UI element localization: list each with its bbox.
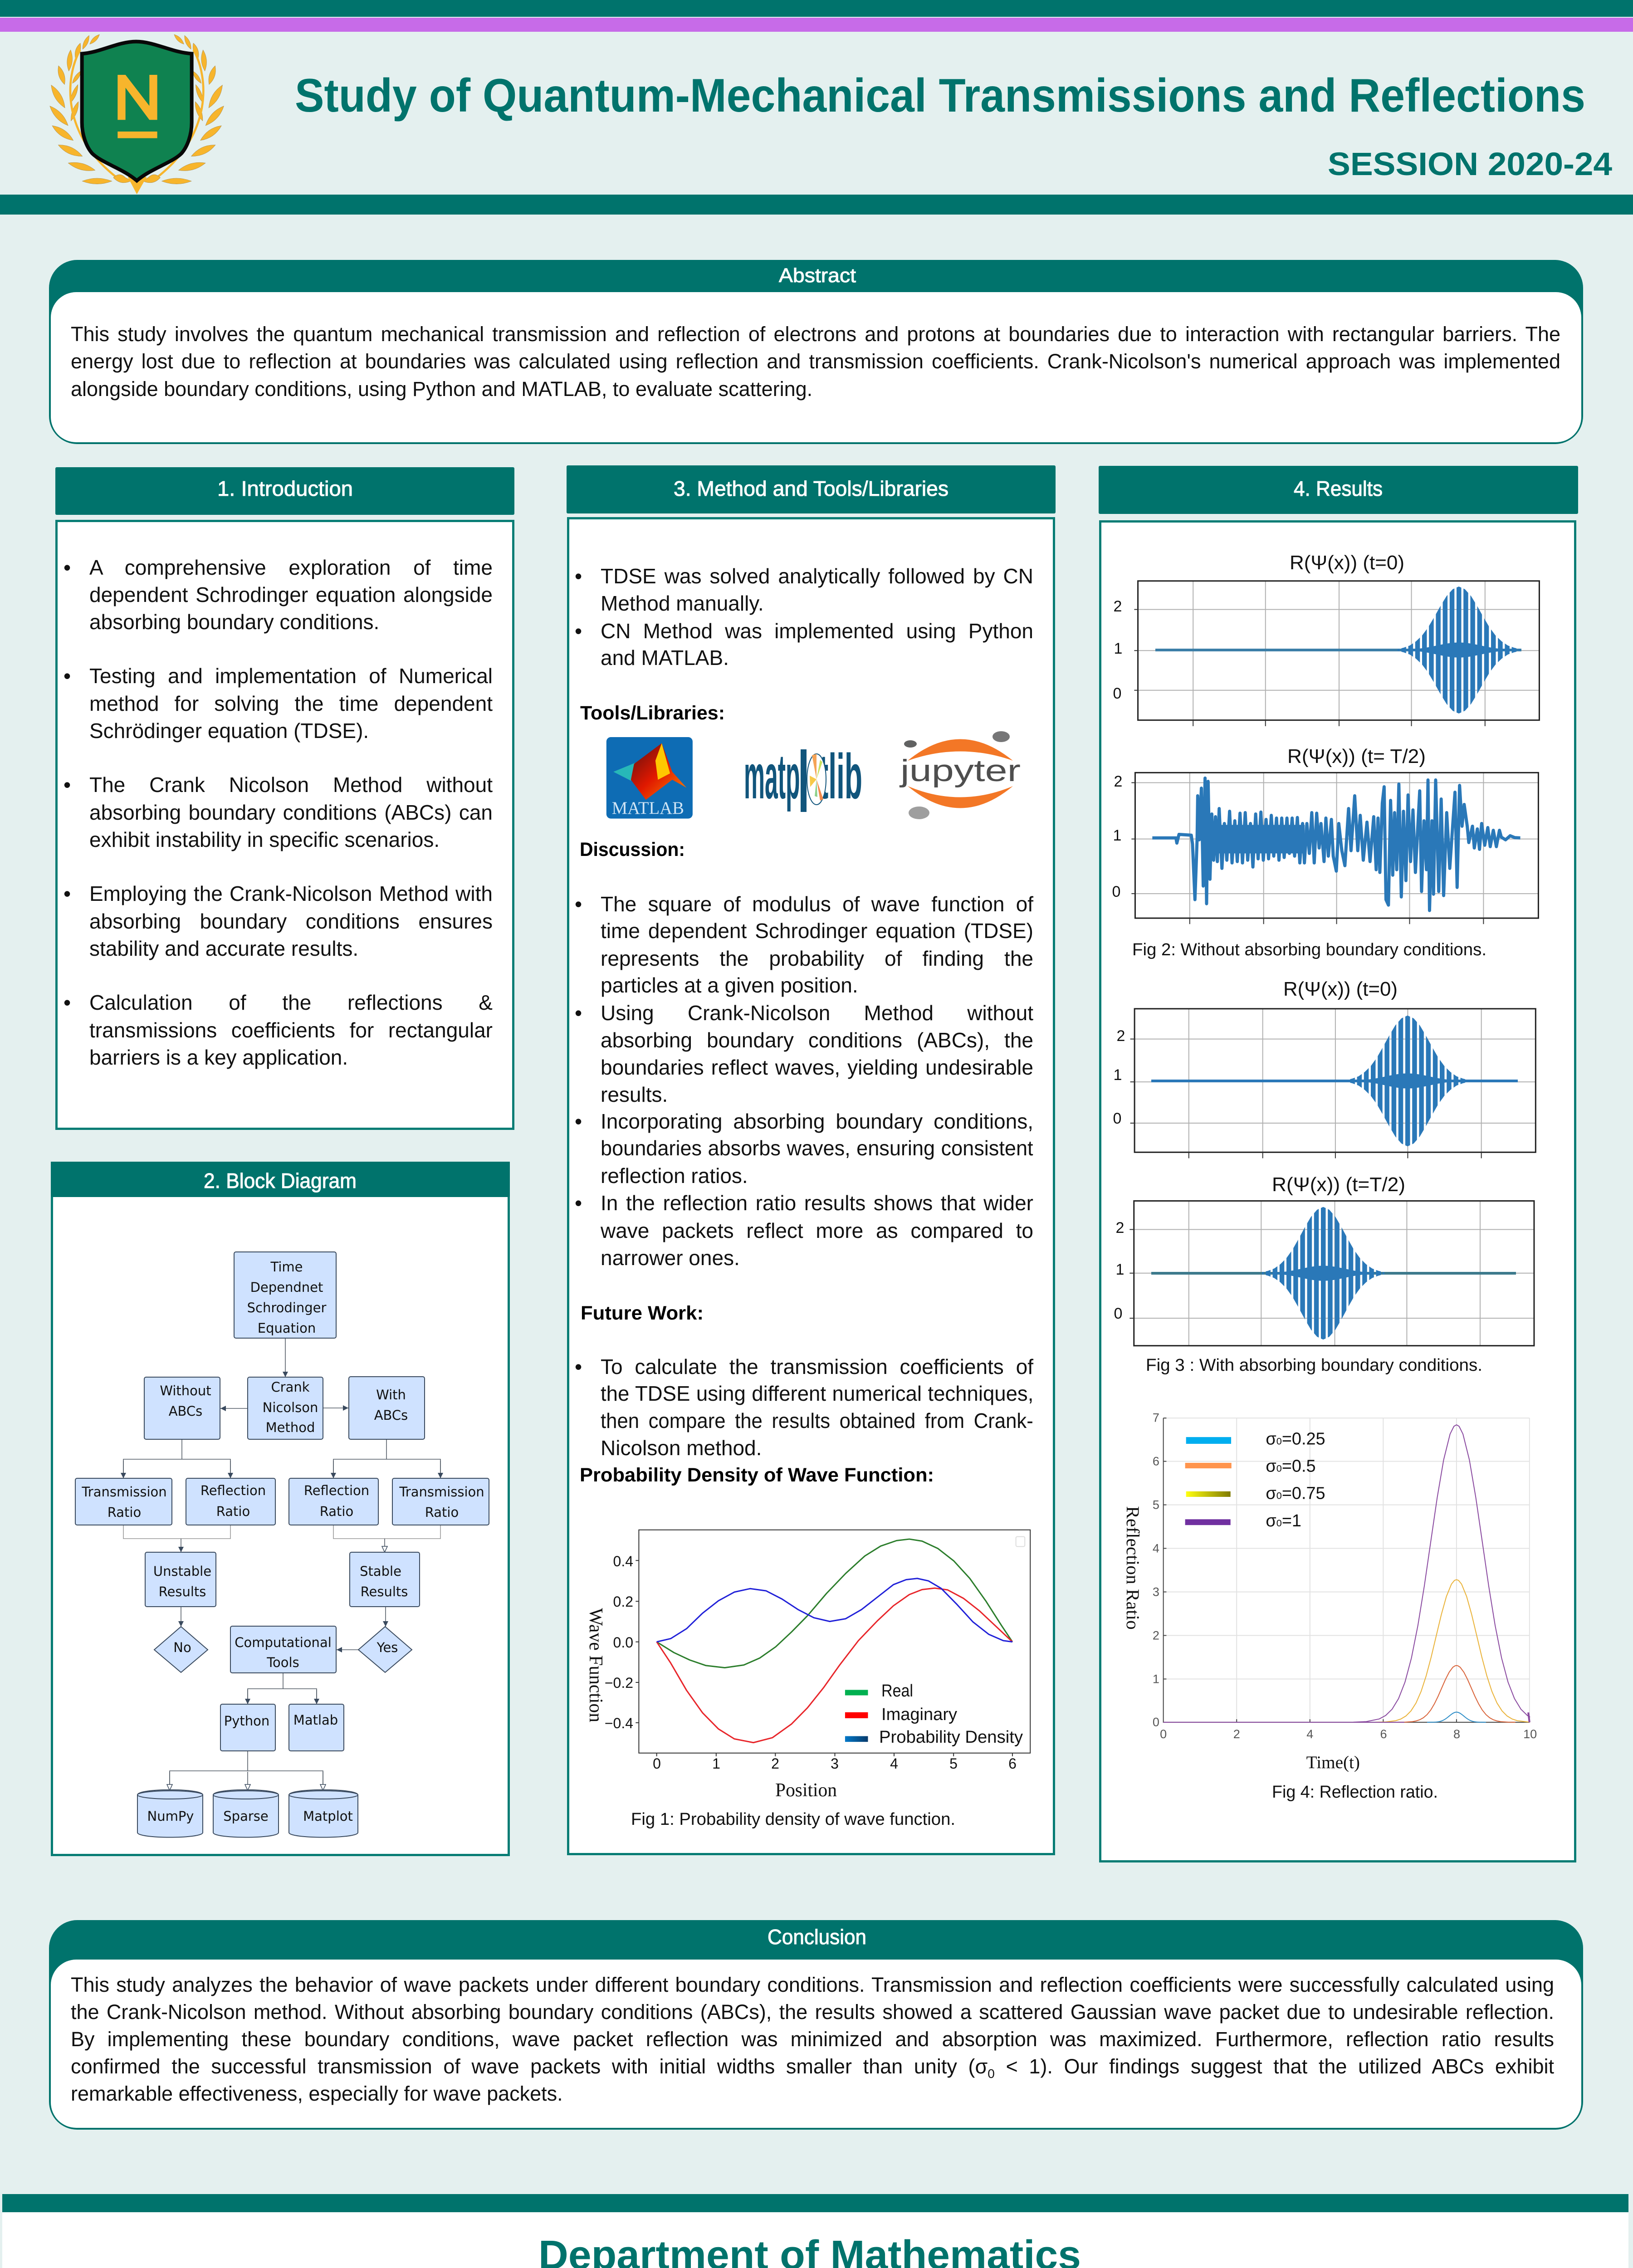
flow node: transmission ratio left: Transmission bbox=[81, 1484, 167, 1500]
icon: matplotlib logo bbox=[744, 741, 862, 812]
bullet list: method bbox=[567, 561, 1056, 674]
flow node: yes decision: Yes bbox=[376, 1640, 398, 1655]
chart: figure 3 bottom, t=T/2: R(Ψ(x)) (t=T/2) bbox=[1272, 1173, 1405, 1196]
chart: figure 4 reflection ratio: 4 bbox=[1153, 1541, 1159, 1555]
chart: figure 4 reflection ratio: 8 bbox=[1453, 1727, 1460, 1741]
flow node: with abcs bbox=[349, 1377, 425, 1439]
header band with logo and title bbox=[0, 0, 1633, 215]
chart: figure 2 top, t=0: R(Ψ(x)) (t=0) bbox=[1290, 552, 1404, 574]
bullet list: discussion: • bbox=[575, 1001, 582, 1025]
conclusion text bbox=[49, 1920, 1583, 2130]
chart: figure 1 wave function: 0.4 bbox=[613, 1553, 633, 1569]
conclusion text: This study analyzes the behavior of wave packets under different boundary conditions. Transmission and reflection coefficients were successfully calculated using bbox=[71, 1973, 1554, 1996]
probability density heading: Probability Density of Wave Function: bbox=[580, 1464, 934, 1486]
bullet list: discussion: absorbing boundary conditions (ABCs), the bbox=[601, 1028, 1033, 1052]
flow node: stable results bbox=[350, 1552, 420, 1607]
flow node: matplot store: Matplot bbox=[303, 1809, 353, 1824]
chart: figure 2 top, t=0: 2 bbox=[1114, 598, 1122, 615]
chart: figure 3 bottom, t=T/2: 1 bbox=[1116, 1261, 1124, 1278]
bullet: crank nicolson with abcs: stability and accurate results. bbox=[89, 937, 358, 960]
bullet list: method: • bbox=[575, 564, 582, 588]
flow node: reflection ratio right: Reflection bbox=[304, 1483, 369, 1498]
abstract body background bbox=[51, 292, 1581, 442]
flow node: python bbox=[220, 1704, 275, 1751]
flow node: yes decision bbox=[358, 1627, 412, 1672]
bullet: crank nicolson with abcs: • bbox=[64, 882, 71, 905]
bullet list: discussion: time dependent Schrodinger equation (TDSE) bbox=[601, 919, 1033, 943]
method heading: 3. Method and Tools/Libraries bbox=[674, 477, 949, 500]
panel: 3. method and tools: tlib bbox=[819, 741, 862, 812]
conclusion text: By implementing these boundary conditions, wave packet reflection was minimized and absorption was maximized. Furthermore, reflection ratio results bbox=[71, 2028, 1554, 2051]
chart: figure 3 top, t=0: 0 bbox=[1113, 1110, 1121, 1127]
future work heading: Future Work: bbox=[581, 1302, 704, 1324]
chart: figure 3 top, t=0: 1 bbox=[1114, 1066, 1122, 1084]
abstract text: alongside boundary conditions, using Python and MATLAB, to evaluate scattering. bbox=[71, 377, 812, 401]
flow node: computational tools: Tools bbox=[266, 1655, 299, 1670]
introduction heading: 1. Introduction bbox=[217, 477, 353, 500]
flow node: without abcs: Without bbox=[160, 1383, 211, 1398]
bullet list: method: • bbox=[575, 619, 582, 643]
chart: figure 4 reflection ratio: 1 bbox=[1153, 1672, 1159, 1686]
bullet: coefficients bbox=[55, 989, 514, 1070]
chart: figure 4 reflection ratio: σ0=1 bbox=[1266, 1511, 1301, 1530]
bullet list: discussion: Incorporating absorbing boundary conditions, bbox=[601, 1110, 1033, 1133]
bullet: numerical method: Testing and implementation of Numerical bbox=[89, 664, 493, 688]
flow node: reflection ratio left bbox=[186, 1478, 275, 1525]
flow node: time dependent schrodinger equation: Equation bbox=[258, 1320, 316, 1336]
flow node: time dependent schrodinger equation: Dependnet bbox=[250, 1280, 323, 1295]
chart: figure 4 reflection ratio: 0 bbox=[1160, 1727, 1167, 1741]
flowchart connectors bbox=[123, 1338, 440, 1790]
conclusion text: remarkable effectiveness, especially for wave packets. bbox=[71, 2082, 563, 2105]
bullet: exploration bbox=[55, 553, 514, 635]
flow node: stable results: Results bbox=[361, 1584, 408, 1599]
panel: 1. introduction bbox=[55, 467, 514, 1130]
flow node: computational tools: Computational bbox=[235, 1635, 332, 1650]
chart: figure 4 reflection ratio: 0 bbox=[1153, 1716, 1159, 1729]
flow node: crank nicolson method: Method bbox=[266, 1420, 315, 1435]
footer bbox=[0, 2194, 1633, 2268]
bottom teal bar bbox=[0, 195, 1633, 215]
introduction body bbox=[55, 520, 514, 1130]
bullet list: discussion: • bbox=[575, 1110, 582, 1133]
chart: figure 1 wave function: Position bbox=[775, 1780, 837, 1801]
bullet list: discussion bbox=[567, 892, 1056, 1273]
chart: figure 4 reflection ratio: 6 bbox=[1380, 1727, 1387, 1741]
chart: figure 1 wave function: Probability Density bbox=[879, 1728, 1023, 1747]
top teal bar bbox=[0, 0, 1633, 17]
flow node: crank nicolson method bbox=[248, 1377, 323, 1439]
figure 1 caption: Fig 1: Probability density of wave function. bbox=[631, 1810, 955, 1829]
results heading: 4. Results bbox=[1294, 477, 1383, 500]
bullet: numerical method: Schrödinger equation (TDSE). bbox=[89, 719, 369, 743]
chart: figure 1 wave function: Real bbox=[881, 1681, 913, 1701]
bullet list: discussion: The square of modulus of wave function of bbox=[601, 892, 1033, 916]
chart: figure 4 reflection ratio: Reflection Ratio bbox=[1123, 1506, 1143, 1630]
icon: university shield logo bbox=[48, 33, 226, 194]
tools heading: Tools/Libraries: bbox=[580, 702, 725, 724]
block diagram body bbox=[51, 1162, 510, 1856]
figure 3 caption: Fig 3 : With absorbing boundary conditions. bbox=[1146, 1356, 1482, 1375]
bullet list: future work bbox=[567, 1354, 1056, 1463]
bullet list: future work: the TDSE using different numerical techniques, bbox=[601, 1382, 1033, 1405]
bullet list: discussion: In the reflection ratio results shows that wider bbox=[601, 1191, 1033, 1215]
bullet list: discussion: represents the probability of finding the bbox=[601, 947, 1033, 970]
flow node: no decision bbox=[154, 1627, 208, 1672]
flow node: transmission ratio right: Transmission bbox=[399, 1484, 484, 1500]
chart: figure 4 reflection ratio: 10 bbox=[1523, 1727, 1537, 1741]
bullet list: discussion: • bbox=[575, 892, 582, 916]
chart: figure 3 bottom, t=T/2 bbox=[1114, 1173, 1534, 1346]
method header bar bbox=[567, 465, 1056, 513]
bullet: coefficients: Calculation of the reflections & bbox=[89, 991, 493, 1014]
flow node: python: Python bbox=[224, 1713, 269, 1729]
flow node: reflection ratio left: Ratio bbox=[216, 1504, 250, 1519]
flow node: matplot store bbox=[289, 1790, 358, 1837]
bullet: crank nicolson without abcs: The Crank Nicolson Method without bbox=[89, 773, 493, 797]
flow node: time dependent schrodinger equation: Schrodinger bbox=[247, 1300, 326, 1315]
bullet list: discussion: reflection ratios. bbox=[601, 1164, 748, 1188]
bullet: crank nicolson without abcs: absorbing boundary conditions (ABCs) can bbox=[89, 801, 493, 824]
chart: figure 4 reflection ratio: 4 bbox=[1306, 1727, 1313, 1741]
icon: jupyter logo bbox=[899, 731, 1021, 819]
bullet: exploration: absorbing boundary conditions. bbox=[89, 610, 379, 634]
abstract text: This study involves the quantum mechanical transmission and reflection of electrons and protons at boundaries due to interaction with rectangular barriers. The bbox=[71, 323, 1560, 346]
bullet: coefficients: transmissions coefficients for rectangular bbox=[89, 1018, 493, 1042]
bullet list: discussion: particles at a given position. bbox=[601, 973, 858, 997]
panel: abstract bbox=[49, 260, 1583, 444]
chart: figure 2 bottom, t=T/2: 1 bbox=[1113, 827, 1121, 844]
chart: figure 1 wave function: −0.4 bbox=[605, 1715, 633, 1731]
bullet list: method: Method manually. bbox=[601, 591, 764, 615]
chart: figure 2 bottom, t=T/2: 2 bbox=[1114, 773, 1122, 790]
panel: 3. method and tools bbox=[567, 465, 1056, 1855]
chart: figure 1 wave function: 4 bbox=[890, 1755, 898, 1772]
session label: SESSION 2020-24 bbox=[1328, 147, 1613, 182]
bullet list: discussion: wave packets reflect more as compared to bbox=[601, 1219, 1033, 1242]
bullet list: discussion: boundaries reflect waves, yielding undesirable bbox=[601, 1056, 1033, 1079]
conclusion text: confirmed the successful transmission of wave packets with initial widths smaller than unity (σ0 < 1). Our findings suggest that the utilized ABCs exhibit bbox=[71, 2055, 1554, 2081]
bullet list: method: and MATLAB. bbox=[601, 646, 729, 670]
icon: matlab logo: MATLAB bbox=[612, 798, 684, 818]
figure 4 caption: Fig 4: Reflection ratio. bbox=[1272, 1783, 1438, 1802]
footer teal strip bbox=[2, 2194, 1628, 2212]
results header bar bbox=[1099, 466, 1578, 514]
flow node: reflection ratio right: Ratio bbox=[320, 1504, 353, 1519]
flow node: transmission ratio left bbox=[75, 1478, 172, 1525]
flow node: numpy store: NumPy bbox=[147, 1809, 194, 1824]
flow node: without abcs: ABCs bbox=[169, 1403, 202, 1419]
panel: conclusion bbox=[49, 1920, 1583, 2130]
chart: figure 4 reflection ratio bbox=[1123, 1411, 1560, 1772]
bullet list: future work: then compare the results obtained from Crank- bbox=[601, 1409, 1033, 1432]
icon: jupyter logo: jupyter bbox=[899, 753, 1021, 788]
flow node: time dependent schrodinger equation: Time bbox=[270, 1259, 303, 1275]
chart: figure 2 top, t=0: 0 bbox=[1113, 685, 1121, 702]
chart: figure 3 top, t=0 bbox=[1113, 978, 1535, 1158]
bullet: coefficients: barriers is a key application. bbox=[89, 1046, 348, 1069]
block diagram header bar bbox=[51, 1162, 510, 1197]
bullet: crank nicolson with abcs bbox=[55, 880, 514, 962]
figure 2 caption: Fig 2: Without absorbing boundary conditions. bbox=[1132, 940, 1486, 959]
bullet list: future work: Nicolson method. bbox=[601, 1436, 762, 1460]
chart: figure 1 wave function: 3 bbox=[831, 1755, 839, 1772]
bullet list: method: CN Method was implemented using Python bbox=[601, 619, 1033, 643]
chart: figure 4 reflection ratio: σ0=0.75 bbox=[1266, 1484, 1325, 1503]
abstract heading: Abstract bbox=[779, 264, 856, 287]
chart: figure 2 top, t=0: 1 bbox=[1114, 640, 1122, 657]
bullet: crank nicolson without abcs: • bbox=[64, 773, 71, 797]
flow node: numpy store bbox=[137, 1790, 203, 1837]
purple bar bbox=[0, 18, 1633, 32]
flow node: time dependent schrodinger equation bbox=[234, 1252, 336, 1338]
chart: figure 1 wave function: 0.0 bbox=[613, 1634, 633, 1651]
bullet: numerical method: • bbox=[64, 664, 71, 688]
bullet: numerical method bbox=[55, 662, 514, 744]
chart: figure 4 reflection ratio: 2 bbox=[1233, 1727, 1240, 1741]
bullet: exploration: A comprehensive exploration of time bbox=[89, 556, 493, 579]
panel: 4. results bbox=[1099, 466, 1578, 1862]
bullet: crank nicolson with abcs: Employing the Crank-Nicolson Method with bbox=[89, 882, 493, 905]
method body bbox=[567, 517, 1055, 1855]
chart: figure 2 bottom, t=T/2 bbox=[1112, 745, 1538, 924]
icon: matplotlib logo: matpl bbox=[744, 741, 807, 812]
bullet: crank nicolson without abcs: exhibit instability in specific scenarios. bbox=[89, 828, 440, 851]
bullet list: future work: • bbox=[575, 1355, 582, 1378]
chart: figure 4 reflection ratio: σ0=0.5 bbox=[1266, 1457, 1316, 1476]
flow node: reflection ratio left: Reflection bbox=[200, 1483, 266, 1498]
bullet list: future work: To calculate the transmission coefficients of bbox=[601, 1355, 1033, 1378]
flow node: transmission ratio right: Ratio bbox=[425, 1505, 459, 1520]
flow node: matlab: Matlab bbox=[293, 1712, 338, 1728]
flow node: unstable results bbox=[145, 1552, 216, 1607]
chart: figure 1 wave function bbox=[585, 1530, 1030, 1801]
abstract text bbox=[49, 260, 1583, 444]
flow node: no decision: No bbox=[173, 1640, 191, 1655]
bullet: coefficients: • bbox=[64, 991, 71, 1014]
chart: figure 1 wave function: 6 bbox=[1008, 1755, 1017, 1772]
flow node: reflection ratio right bbox=[289, 1478, 378, 1525]
chart: figure 4 reflection ratio: 7 bbox=[1153, 1411, 1159, 1424]
introduction header bar bbox=[55, 467, 514, 515]
flow node: computational tools bbox=[230, 1626, 336, 1673]
flow node: sparse store bbox=[213, 1790, 279, 1837]
flow node: with abcs: ABCs bbox=[374, 1408, 408, 1423]
flow node: sparse store: Sparse bbox=[223, 1809, 269, 1824]
footer white band bbox=[2, 2212, 1628, 2268]
flow node: unstable results: Results bbox=[159, 1584, 206, 1599]
chart: figure 4 reflection ratio: 6 bbox=[1153, 1454, 1159, 1468]
bullet list: discussion: • bbox=[575, 1191, 582, 1215]
chart: figure 2 top, t=0 bbox=[1113, 552, 1539, 726]
chart: figure 3 bottom, t=T/2: 0 bbox=[1114, 1305, 1122, 1322]
bullet list: discussion: Using Crank-Nicolson Method without bbox=[601, 1001, 1033, 1025]
chart: figure 4 reflection ratio: σ0=0.25 bbox=[1266, 1429, 1325, 1448]
flow node: transmission ratio right bbox=[392, 1478, 489, 1525]
chart: figure 1 wave function: −0.2 bbox=[605, 1675, 633, 1691]
chart: figure 3 top, t=0: R(Ψ(x)) (t=0) bbox=[1283, 978, 1398, 1000]
chart: figure 3 bottom, t=T/2: 2 bbox=[1116, 1219, 1124, 1237]
flow node: crank nicolson method: Nicolson bbox=[263, 1400, 318, 1415]
icon: matlab logo bbox=[606, 737, 693, 819]
bullet: exploration: • bbox=[64, 556, 71, 579]
chart: figure 1 wave function: Imaginary bbox=[881, 1705, 957, 1724]
chart: figure 2 bottom, t=T/2: R(Ψ(x)) (t= T/2) bbox=[1287, 745, 1426, 767]
chart: figure 4 reflection ratio: 3 bbox=[1153, 1585, 1159, 1598]
chart: figure 4 reflection ratio: Time(t) bbox=[1306, 1753, 1360, 1772]
chart: figure 1 wave function: 2 bbox=[771, 1755, 779, 1772]
bullet: numerical method: method for solving the time dependent bbox=[89, 692, 493, 715]
chart: figure 1 wave function: 0.2 bbox=[613, 1593, 633, 1610]
conclusion heading: Conclusion bbox=[768, 1925, 866, 1949]
flow node: without abcs bbox=[144, 1377, 220, 1439]
chart: figure 1 wave function: 5 bbox=[949, 1755, 958, 1772]
block diagram heading: 2. Block Diagram bbox=[204, 1169, 357, 1193]
chart: figure 1 wave function: 1 bbox=[712, 1755, 720, 1772]
flow node: matlab bbox=[289, 1704, 344, 1751]
panel: 2. block diagram bbox=[51, 1162, 510, 1856]
abstract text: energy lost due to reflection at boundaries was calculated using reflection and transmission coefficients. Crank-Nicolson's numerical approach was implemented bbox=[71, 350, 1560, 373]
bullet list: method: TDSE was solved analytically followed by CN bbox=[601, 564, 1033, 588]
chart: figure 3 top, t=0: 2 bbox=[1117, 1027, 1125, 1045]
conclusion body background bbox=[51, 1960, 1581, 2128]
chart: figure 4 reflection ratio: 2 bbox=[1153, 1628, 1159, 1642]
bullet list: discussion: results. bbox=[601, 1083, 668, 1106]
bullet: crank nicolson with abcs: absorbing boundary conditions ensures bbox=[89, 909, 493, 933]
flow node: transmission ratio left: Ratio bbox=[108, 1505, 141, 1520]
chart: figure 4 reflection ratio: 5 bbox=[1153, 1498, 1159, 1511]
flow node: with abcs: With bbox=[376, 1387, 406, 1403]
chart: figure 2 bottom, t=T/2: 0 bbox=[1112, 883, 1120, 900]
flow node: unstable results: Unstable bbox=[153, 1564, 211, 1579]
bullet: exploration: dependent Schrodinger equation alongside bbox=[89, 583, 493, 606]
bullet list: discussion: boundaries absorbs waves, ensuring consistent bbox=[601, 1136, 1033, 1160]
conclusion text: the Crank-Nicolson method. Without absorbing boundary conditions (ABCs), the results showed a scattered Gaussian wave packet due to undesirable reflection. bbox=[71, 2000, 1554, 2024]
results body bbox=[1099, 520, 1576, 1862]
flow node: stable results: Stable bbox=[360, 1564, 401, 1579]
flow node: crank nicolson method: Crank bbox=[271, 1379, 310, 1395]
bullet list: discussion: narrower ones. bbox=[601, 1246, 740, 1270]
chart: figure 1 wave function: 0 bbox=[653, 1755, 661, 1772]
chart: figure 1 wave function: Wave Function bbox=[585, 1608, 606, 1722]
discussion heading: Discussion: bbox=[580, 839, 685, 860]
bullet: crank nicolson without abcs bbox=[55, 771, 514, 853]
